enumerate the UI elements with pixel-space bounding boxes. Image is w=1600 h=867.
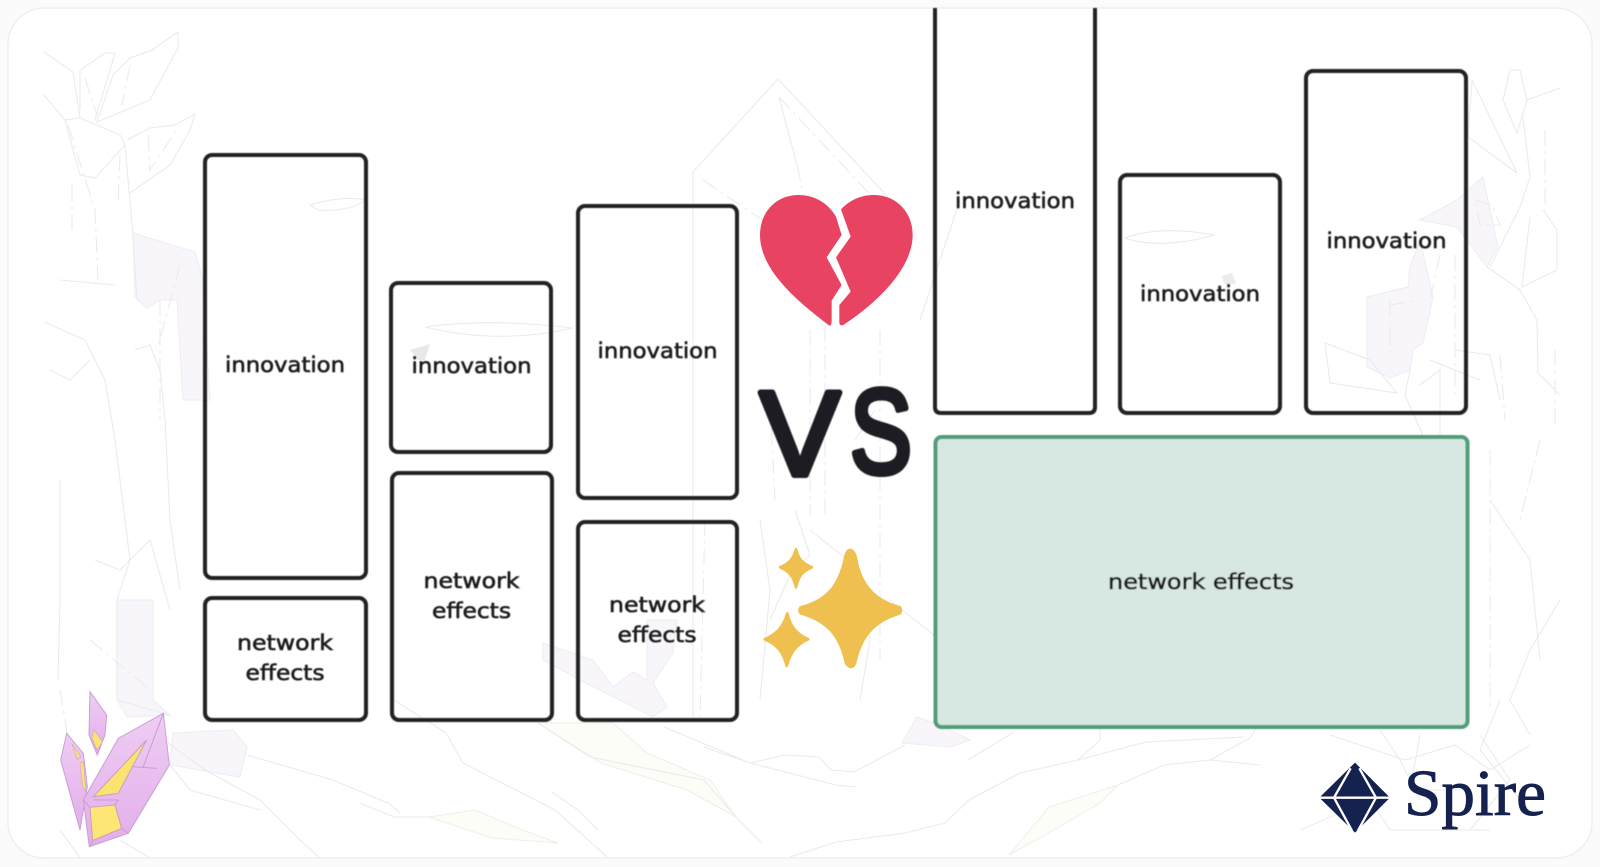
bar 3: network effects: network <box>609 593 706 617</box>
bar 3: innovation: innovation <box>598 339 718 363</box>
VS label <box>760 365 912 501</box>
icon: Spire diamond <box>1319 763 1390 833</box>
icon: sparkles <box>765 549 901 667</box>
large network effects block: network effects <box>1108 570 1294 594</box>
bar 2: network effects <box>392 473 552 720</box>
VS label: V <box>760 367 840 501</box>
logo: Spire <box>1319 757 1546 833</box>
bar 1: innovation: innovation <box>225 353 345 377</box>
wordmark: Spire <box>1404 757 1546 830</box>
right bar 3: innovation <box>1306 71 1466 413</box>
bar 1: network effects: network <box>237 631 334 655</box>
right bar 1: innovation: innovation <box>955 189 1075 213</box>
right bar 2: innovation <box>1120 175 1280 413</box>
bar 2: innovation: innovation <box>412 354 532 378</box>
icon: crystal <box>61 692 169 847</box>
icon: broken heart <box>760 195 913 326</box>
VS label: S <box>850 365 912 499</box>
large network effects block <box>936 437 1468 727</box>
right bar 1: innovation <box>935 8 1095 413</box>
right bar 3: innovation: innovation <box>1326 229 1446 253</box>
bar 1: innovation <box>205 155 366 578</box>
bar 1: network effects: effects <box>246 661 324 685</box>
bar 2: network effects: network <box>424 569 520 593</box>
bar 3: innovation <box>578 206 737 498</box>
bar 1: network effects <box>205 598 366 720</box>
bar 3: network effects: effects <box>618 623 696 647</box>
bar 2: network effects: effects <box>432 599 511 623</box>
bar 2: innovation <box>391 283 551 452</box>
bar 3: network effects <box>578 522 737 720</box>
right bar 2: innovation: innovation <box>1140 282 1260 306</box>
